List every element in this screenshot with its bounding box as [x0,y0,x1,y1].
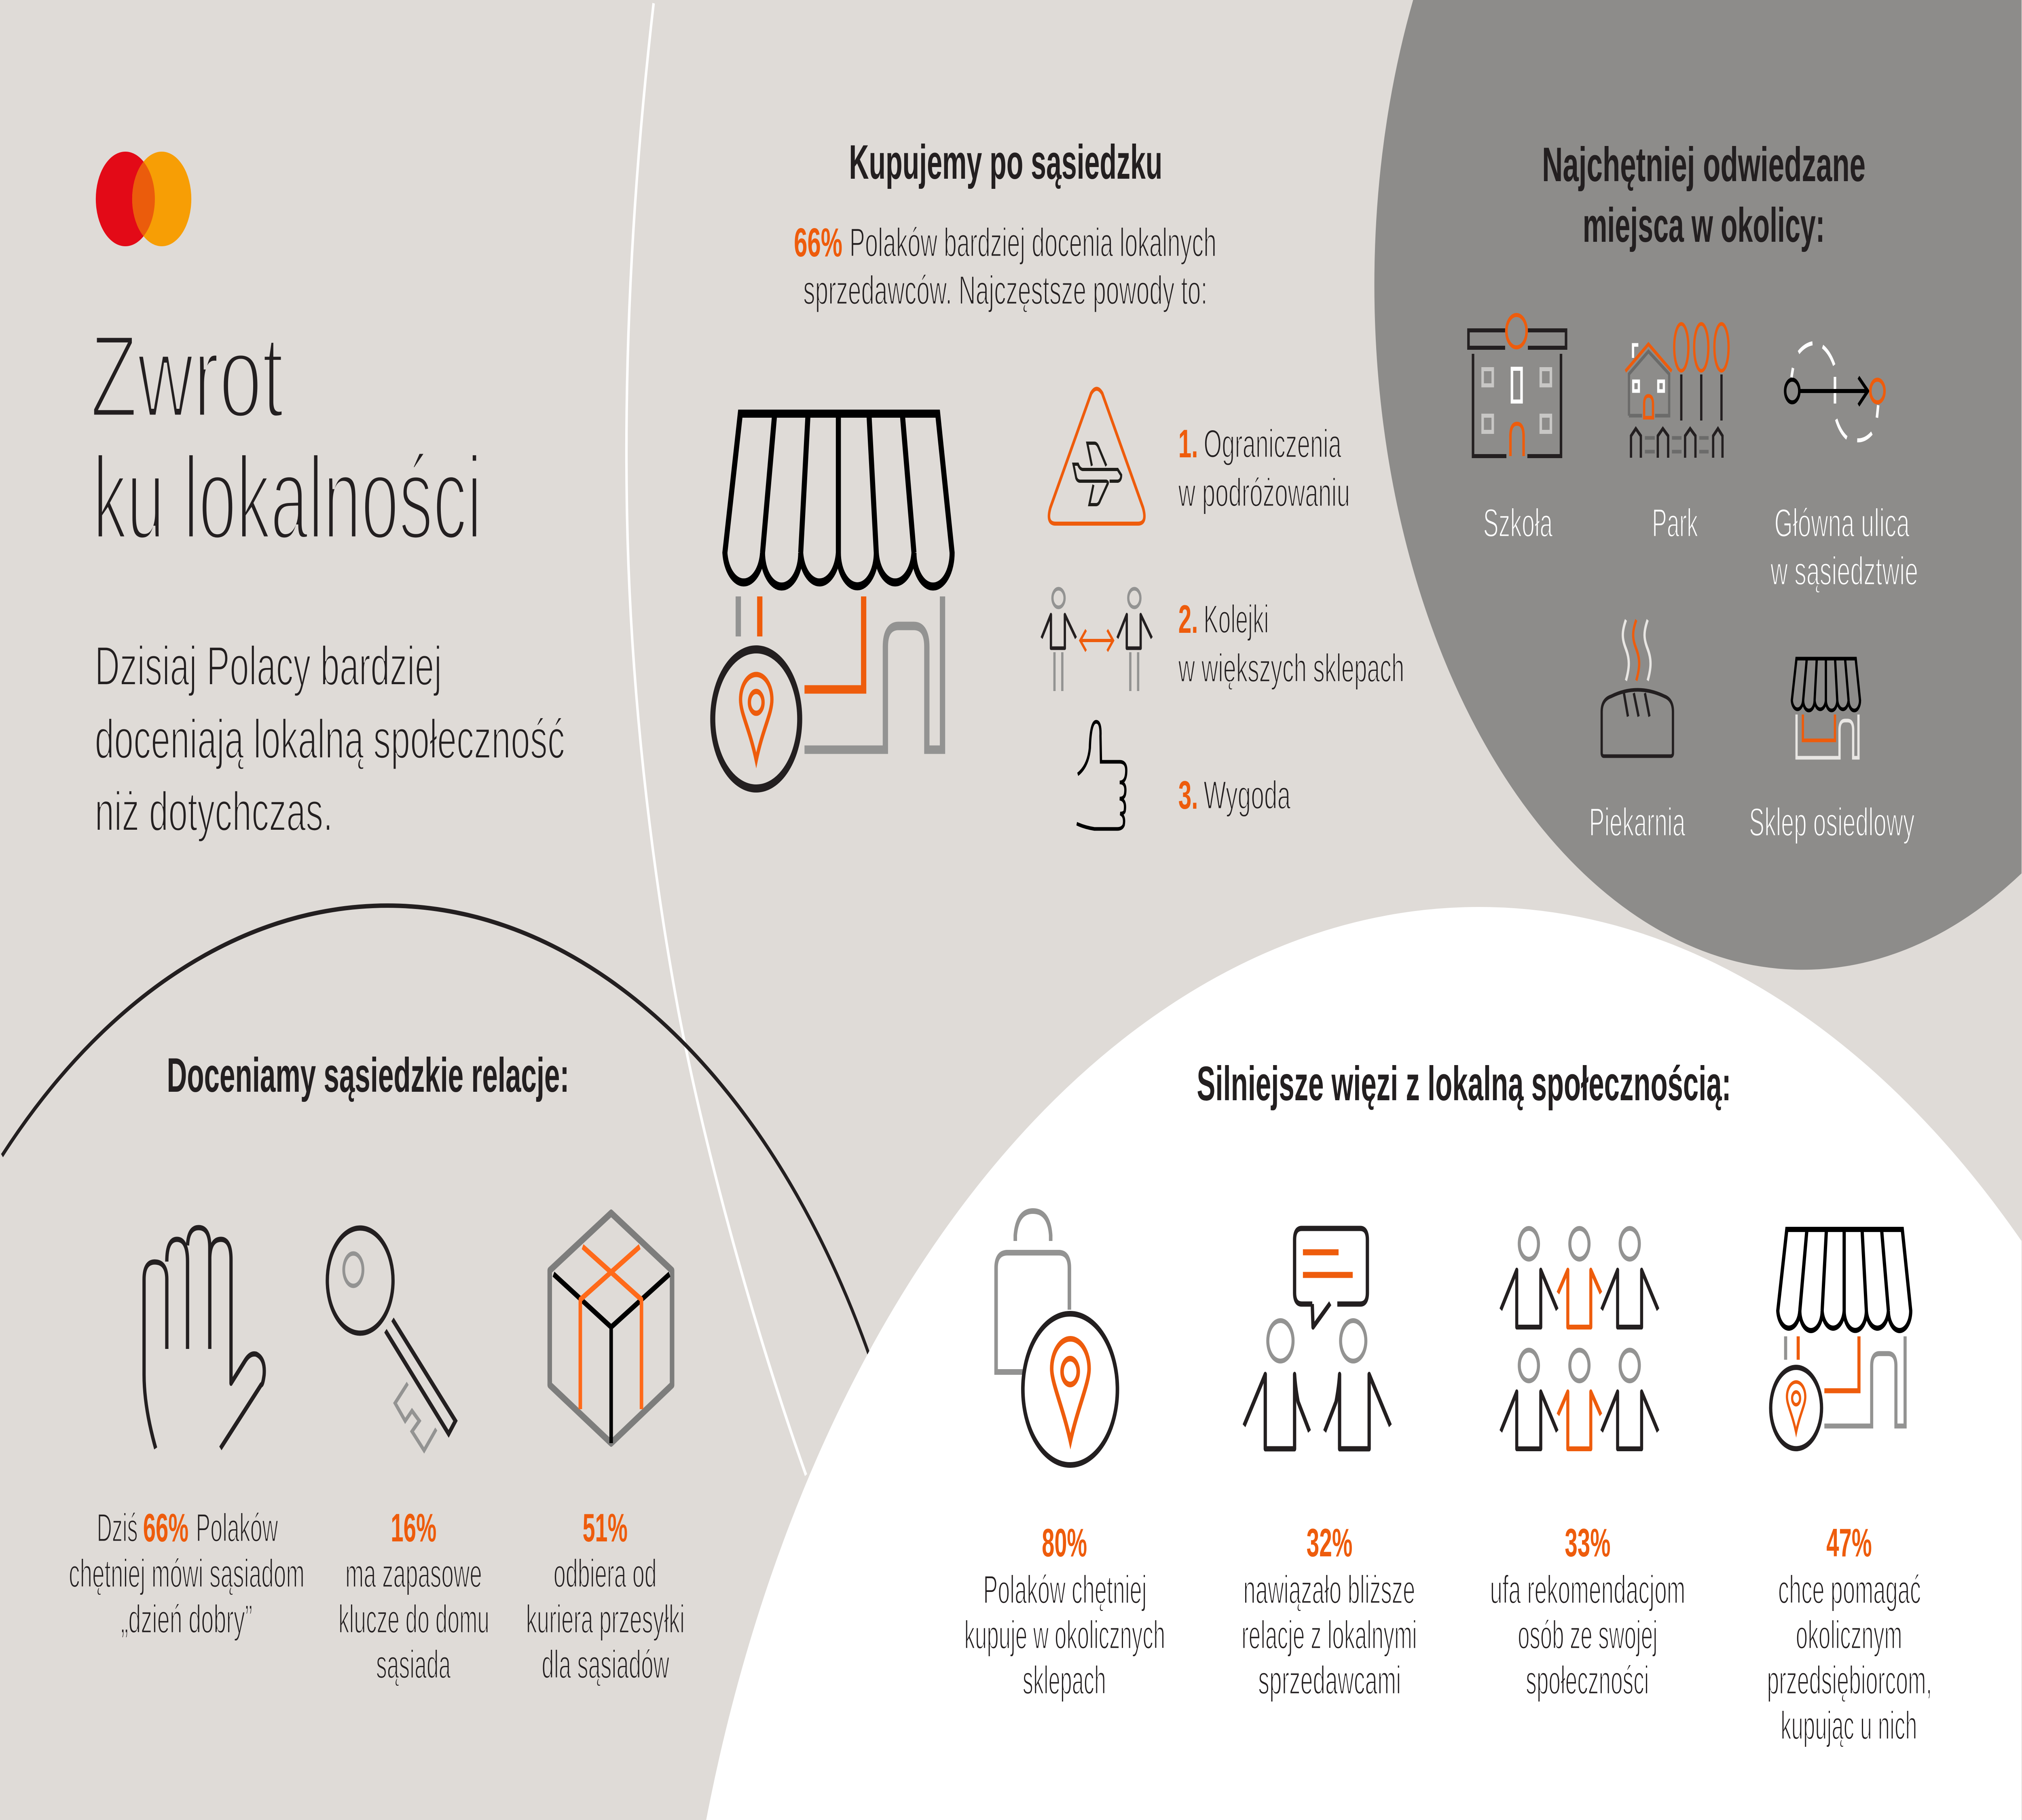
heading: Doceniamy sąsiedzkie relacje: [167,1048,569,1102]
reason 1 label [1178,422,1350,515]
heading: Najchętniej odwiedzane [1542,137,1865,192]
stat: 16%: ma zapasowe [345,1552,482,1596]
reason 1 label: w podróżowaniu [1178,471,1350,515]
intro text: sprzedawców. Najczęstsze powody to: [803,268,1208,313]
stat: 51%: 51% [583,1506,628,1550]
reason 3 label: Wygoda [1203,773,1291,818]
title: ku lokalności [93,432,482,564]
reason 2 label [1178,597,1404,691]
curve: thin white divider [626,3,806,1475]
reason 2 label: Kolejki [1203,597,1269,642]
stat: 80% [964,1521,1165,1703]
subtitle text block: doceniają lokalną społeczność [95,709,565,770]
stat: 66% [69,1506,305,1642]
stat: 32%: nawiązało bliższe [1243,1568,1415,1612]
reason 2 label: w większych sklepach [1178,646,1404,691]
stat: 51%: odbiera od [554,1552,657,1596]
place labels: Piekarnia [1589,800,1686,845]
stat: 33%: 33% [1565,1521,1611,1565]
place labels [1483,501,1918,845]
icon: main street route [1785,343,1885,440]
awning [725,414,952,587]
reason 1 label: 1. [1178,422,1198,466]
icon: neighbourhood shop [1792,659,1860,758]
stat: 33%: osób ze swojej [1518,1613,1658,1657]
stat: 66%: „dzień dobry” [121,1597,252,1642]
stat: 16% [338,1506,489,1687]
stat: 47%: chce pomagać [1778,1568,1921,1612]
stat: 47% [1767,1521,1932,1748]
stat: 33%: społeczności [1526,1658,1649,1703]
stat: 33%: ufa rekomendacjom [1490,1568,1686,1612]
stat: 51%: kuriera przesyłki [526,1597,685,1642]
stat: 32%: relacje z lokalnymi [1242,1613,1417,1657]
icon: shopping bag with pin [996,1211,1117,1465]
stat: 66%: Dziś [97,1506,138,1550]
panel: shopping locally [713,135,1404,829]
icon: park [1625,324,1728,458]
stat: 32%: 32% [1307,1521,1352,1565]
icon: parcel box [550,1213,672,1443]
place labels: Park [1652,501,1698,545]
shop front [738,596,943,750]
heading: Silniejsze więzi z lokalną społecznością: [1197,1057,1731,1111]
subtitle text block: niż dotychczas. [95,781,333,843]
icon: thumbs up [1077,722,1126,829]
stat: 66%: 66% [143,1506,188,1550]
stat: 66%: Polaków [196,1506,278,1550]
stat: 16%: klucze do domu [338,1597,489,1642]
icon: raised hand [144,1228,264,1448]
icon: two people talking [1244,1228,1390,1449]
place labels: Sklep osiedlowy [1749,800,1914,845]
heading: miejsca w okolicy: [1583,198,1825,252]
icon: school [1468,315,1566,456]
stat: 80%: Polaków chętniej [983,1568,1147,1612]
stat: 80%: kupuje w okolicznych [964,1613,1165,1657]
icon: people queue with distance arrow [1042,589,1152,691]
reason 1 label: Ograniczenia [1203,422,1341,466]
reason 3 label: 3. [1178,773,1198,818]
stat: 66%: chętniej mówi sąsiadom [69,1552,305,1596]
heading [1542,137,1865,252]
place labels: w sąsiedztwie [1770,549,1918,594]
heading: Kupujemy po sąsiedzku [849,135,1162,189]
title: Zwrot [90,310,283,442]
reason 2 label: 2. [1178,597,1198,642]
stat: 80%: sklepach [1023,1658,1106,1703]
place labels: Główna ulica [1775,501,1910,545]
stat: 80%: 80% [1042,1521,1087,1565]
stat: 51% [526,1506,685,1687]
stat: 47%: 47% [1826,1521,1872,1565]
intro text: Polaków bardziej docenia lokalnych [850,220,1216,265]
panel: stronger community ties [964,1057,1932,1748]
stat: 32% [1242,1521,1417,1703]
title [90,310,482,564]
icon: travel restriction triangle [1049,389,1144,524]
stat: 47%: kupując u nich [1781,1704,1917,1748]
stat: 16%: sąsiada [376,1642,451,1687]
subtitle text block: Dzisiaj Polacy bardziej [95,636,442,697]
stat: 32%: sprzedawcami [1258,1658,1401,1703]
stat: 16%: 16% [391,1506,436,1550]
intro text [794,220,1216,313]
stat: 33% [1490,1521,1686,1703]
icon: community groups [1501,1228,1658,1449]
shape: grey places circle [1375,0,2022,970]
subtitle text block [95,636,565,843]
location pin [740,674,772,760]
stat: 47%: przedsiębiorcom, [1767,1658,1932,1703]
stat: 47%: okolicznym [1796,1613,1902,1657]
location circle [713,649,800,788]
curve: black arc around neighbour relations [2,906,870,1359]
icon: Mastercard-style logo [96,152,191,246]
panel: most visited places [1468,137,1918,845]
icon: key [327,1228,455,1450]
shape: white community circle [706,907,2022,1820]
panel: neighbour relations [69,1048,685,1687]
icon: bakery bread [1602,620,1673,756]
icon: shop with location pin [713,414,952,788]
place labels: Szkoła [1483,501,1553,545]
intro text: 66% [794,220,842,265]
icon: shop with pin, small [1771,1229,1911,1449]
stat: 51%: dla sąsiadów [541,1642,670,1687]
